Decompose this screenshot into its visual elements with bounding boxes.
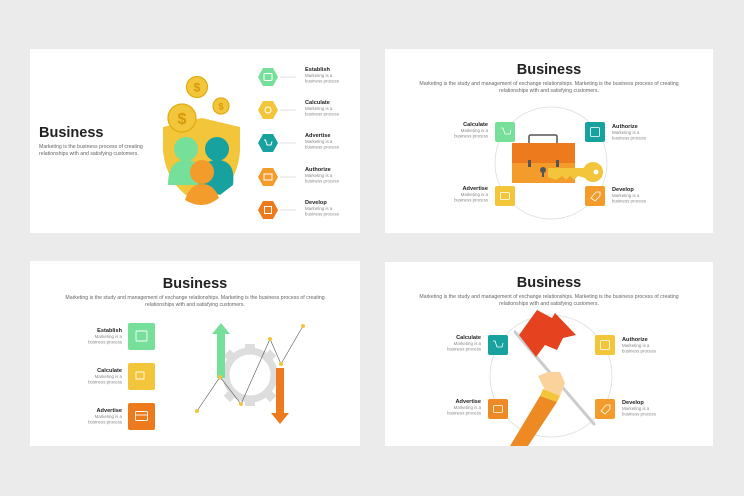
list: quadrant items: business process <box>622 412 657 416</box>
list: hexagon steps: business process <box>305 178 340 184</box>
text block: Marketing is the business process of creating <box>39 144 143 150</box>
list: square items: business process <box>88 420 123 424</box>
list: quadrant items: Marketing is a <box>454 341 482 346</box>
list: square items: Marketing is a <box>95 414 123 419</box>
list: hexagon steps: Marketing is a <box>305 139 333 144</box>
list: square items: Marketing is a <box>95 334 123 339</box>
list: hexagon steps: Marketing is a <box>305 106 333 111</box>
list: hexagon steps: business process <box>305 144 340 150</box>
list: square items: business process <box>88 380 123 384</box>
list: square items: business process <box>88 340 123 344</box>
heading: Business <box>517 62 581 78</box>
list: hexagon steps: Authorize <box>305 167 331 173</box>
panel: shield slide <box>30 49 360 233</box>
list: quadrant items: Marketing is a <box>454 405 482 410</box>
list: hexagon steps: Advertise <box>305 133 330 139</box>
list: quadrant items: Marketing is a <box>461 192 489 197</box>
list: quadrant items: Develop <box>612 187 634 193</box>
text block: Marketing is the study and management of exchange relationships. Marketing is the business process of creating <box>419 81 679 87</box>
list: quadrant items: business process <box>612 136 647 140</box>
list: hexagon steps <box>258 67 340 219</box>
list: square items: Establish <box>97 328 123 334</box>
heading: Business <box>163 276 227 292</box>
list: quadrant items: Calculate <box>456 335 481 341</box>
panel: flag slide <box>385 262 713 446</box>
list: quadrant items: Authorize <box>612 124 638 130</box>
text block: Marketing is the study and management of exchange relationships. Marketing is the business process of creating <box>419 294 679 300</box>
icon: coins: $ <box>194 80 201 94</box>
list: quadrant items: Marketing is a <box>612 193 640 198</box>
list: square items: Marketing is a <box>95 374 123 379</box>
list: quadrant items: business process <box>454 134 489 138</box>
list: quadrant items: business process <box>454 198 489 202</box>
panel: briefcase slide: relationships with and satisfying customers. <box>499 88 599 94</box>
list: quadrant items <box>454 122 647 206</box>
list: quadrant items: Authorize <box>622 337 648 343</box>
list: quadrant items: Marketing is a <box>612 130 640 135</box>
chart: gear with arrows and line <box>195 323 305 424</box>
panel: briefcase slide <box>385 49 713 233</box>
list: quadrant items: Advertise <box>462 186 488 192</box>
list: hexagon steps: Calculate <box>305 100 330 106</box>
list: hexagon steps: Establish <box>305 67 330 73</box>
list: quadrant items: business process <box>447 410 482 416</box>
icon: coins: $ <box>178 111 187 128</box>
list: square items: Advertise <box>96 408 122 414</box>
list: quadrant items: business process <box>612 198 647 204</box>
list: hexagon steps: Develop <box>305 200 327 206</box>
list: quadrant items: Develop <box>622 400 644 406</box>
list: quadrant items: Marketing is a <box>622 343 650 348</box>
icon: coins: $ <box>218 102 224 112</box>
panel: gear slide: relationships with and satisfying customers. <box>145 302 245 308</box>
icon: coins <box>168 76 229 132</box>
list: square items <box>88 323 155 430</box>
panel: flag slide: relationships with and satisfying customers. <box>499 301 599 307</box>
icon: hand with flag <box>510 310 594 446</box>
list: quadrant items: Marketing is a <box>622 406 650 411</box>
list: quadrant items: Advertise <box>456 399 481 405</box>
list: hexagon steps: Marketing is a <box>305 173 333 178</box>
list: hexagon steps: Marketing is a <box>305 73 333 78</box>
panel: gear slide <box>30 261 360 446</box>
text block: Marketing is the study and management of exchange relationships. Marketing is the business process of creating <box>65 295 325 301</box>
heading: Business <box>39 125 103 141</box>
list: hexagon steps: business process <box>305 78 340 84</box>
list: hexagon steps: business process <box>305 212 340 216</box>
list: quadrant items: Marketing is a <box>461 128 489 133</box>
panel: shield slide: relationships with and satisfying customers. <box>39 151 139 157</box>
list: quadrant items: business process <box>622 348 657 354</box>
icon: shield with people <box>163 118 240 205</box>
list: quadrant items: business process <box>447 346 482 352</box>
icon: briefcase with key <box>512 135 603 183</box>
list: quadrant items <box>447 335 657 419</box>
heading: Business <box>517 275 581 291</box>
list: square items: Calculate <box>97 368 122 374</box>
list: hexagon steps: Marketing is a <box>305 206 333 211</box>
list: quadrant items: Calculate <box>463 122 488 128</box>
list: hexagon steps: business process <box>305 112 340 116</box>
